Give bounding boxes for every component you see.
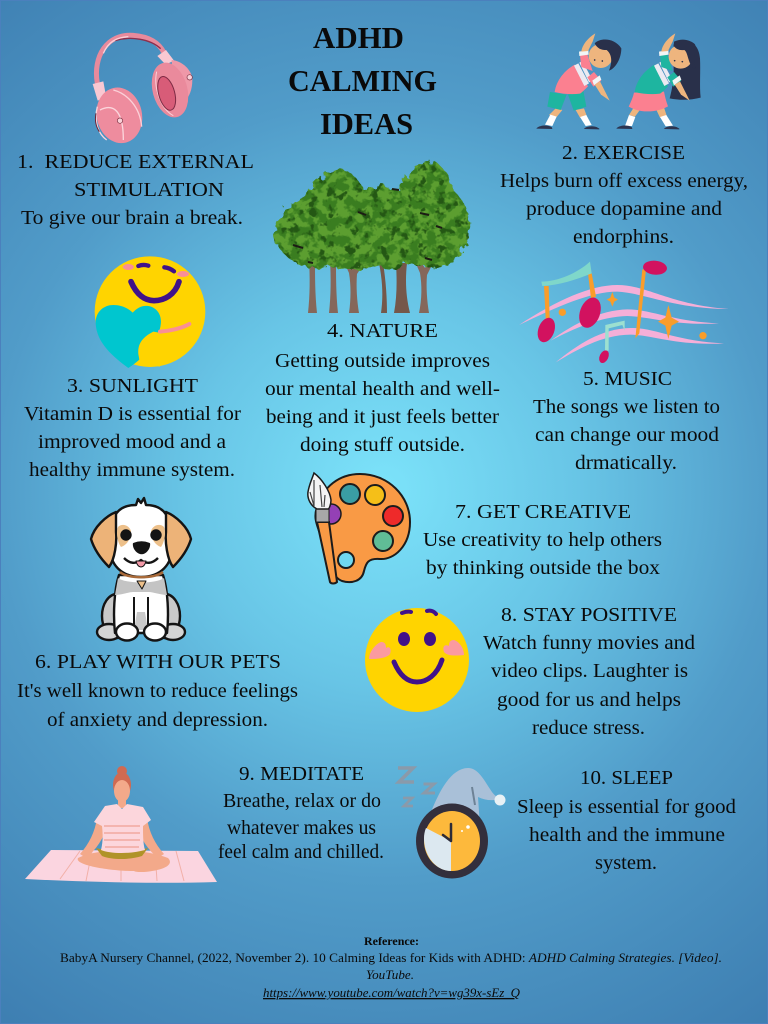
text: meditate — [218, 763, 384, 863]
icon: paint palette and brush — [308, 473, 410, 584]
text: meditate: whatever makes us — [227, 817, 376, 839]
text: sleep: 10. SLEEP — [580, 767, 673, 789]
text: exercise: endorphins. — [573, 226, 674, 248]
text: sunlight: improved mood and a — [38, 431, 226, 453]
text: music: drmatically. — [575, 452, 677, 474]
text: music: The songs we listen to — [533, 396, 720, 418]
text: stay positive: video clips. Laughter is — [491, 660, 688, 682]
text: nature: doing stuff outside. — [300, 434, 465, 456]
title — [288, 20, 437, 141]
icon: puppy — [91, 498, 191, 640]
reference — [60, 934, 722, 1000]
text: reduce external stimulation: STIMULATION — [74, 179, 224, 201]
icon: trees — [274, 161, 469, 313]
text: sunlight: 3. SUNLIGHT — [67, 375, 198, 397]
text: get creative: by thinking outside the box — [426, 557, 660, 579]
text: play with our pets — [17, 651, 298, 731]
text: exercise: 2. EXERCISE — [562, 142, 685, 164]
text: meditate: feel calm and chilled. — [218, 841, 384, 863]
text: play with our pets: It's well known to reduce feelings — [17, 680, 298, 702]
text: exercise — [500, 142, 748, 248]
text: sleep — [517, 767, 736, 874]
text: nature — [265, 320, 500, 456]
text: sunlight: healthy immune system. — [29, 459, 235, 481]
text: sleep: health and the immune — [529, 824, 725, 846]
icon: headphones — [91, 35, 194, 147]
reference: YouTube. — [366, 967, 414, 982]
text: reduce external stimulation — [17, 151, 254, 229]
reference: BabyA Nursery Channel, (2022, November 2). 10 Calming Ideas for Kids with ADHD: ADHD Calming Strategies. [Video]. — [60, 950, 722, 965]
girl — [616, 33, 701, 129]
icon: meditating woman — [25, 766, 217, 883]
text: stay positive: reduce stress. — [532, 717, 645, 739]
text: music: can change our mood — [535, 424, 719, 446]
text: stay positive: 8. STAY POSITIVE — [501, 604, 677, 626]
icon: exercising children — [536, 33, 701, 129]
text: nature: being and it just feels better — [266, 406, 499, 428]
text: sleep: system. — [595, 852, 657, 874]
text: stay positive: good for us and helps — [497, 689, 681, 711]
boy — [536, 33, 621, 129]
text: music — [533, 368, 720, 474]
title: ADHD — [313, 20, 404, 55]
title: CALMING — [288, 63, 437, 98]
text: nature: 4. NATURE — [327, 320, 438, 342]
title: IDEAS — [320, 106, 413, 141]
text: nature: our mental health and well- — [265, 378, 500, 400]
text: meditate: 9. MEDITATE — [239, 763, 364, 785]
text: get creative: 7. GET CREATIVE — [455, 501, 631, 523]
text: exercise: produce dopamine and — [526, 198, 722, 220]
reference: Reference: — [364, 934, 419, 948]
icon: smiling sun hugging a heart — [95, 256, 205, 368]
text: sleep: Sleep is essential for good — [517, 796, 736, 818]
icon: happy face — [365, 608, 469, 712]
text: sunlight: Vitamin D is essential for — [24, 403, 241, 425]
text: sunlight — [24, 375, 241, 481]
reference: https://www.youtube.com/watch?v=wg39x-sEz_Q — [263, 985, 521, 1000]
text: music: 5. MUSIC — [583, 368, 672, 390]
text: reduce external stimulation: 1. REDUCE EXTERNAL — [17, 151, 254, 173]
text: stay positive: Watch funny movies and — [483, 632, 695, 654]
icon: music notes — [519, 260, 729, 365]
text: play with our pets: of anxiety and depression. — [47, 709, 268, 731]
text: reduce external stimulation: To give our brain a break. — [21, 207, 243, 229]
text: exercise: Helps burn off excess energy, — [500, 170, 748, 192]
icon: sleep clock with nightcap — [398, 768, 506, 878]
text: nature: Getting outside improves — [275, 350, 490, 372]
text: get creative: Use creativity to help others — [423, 529, 662, 551]
text: meditate: Breathe, relax or do — [223, 790, 381, 812]
text: get creative — [423, 501, 662, 579]
text: stay positive — [483, 604, 695, 739]
text: play with our pets: 6. PLAY WITH OUR PETS — [35, 651, 281, 673]
